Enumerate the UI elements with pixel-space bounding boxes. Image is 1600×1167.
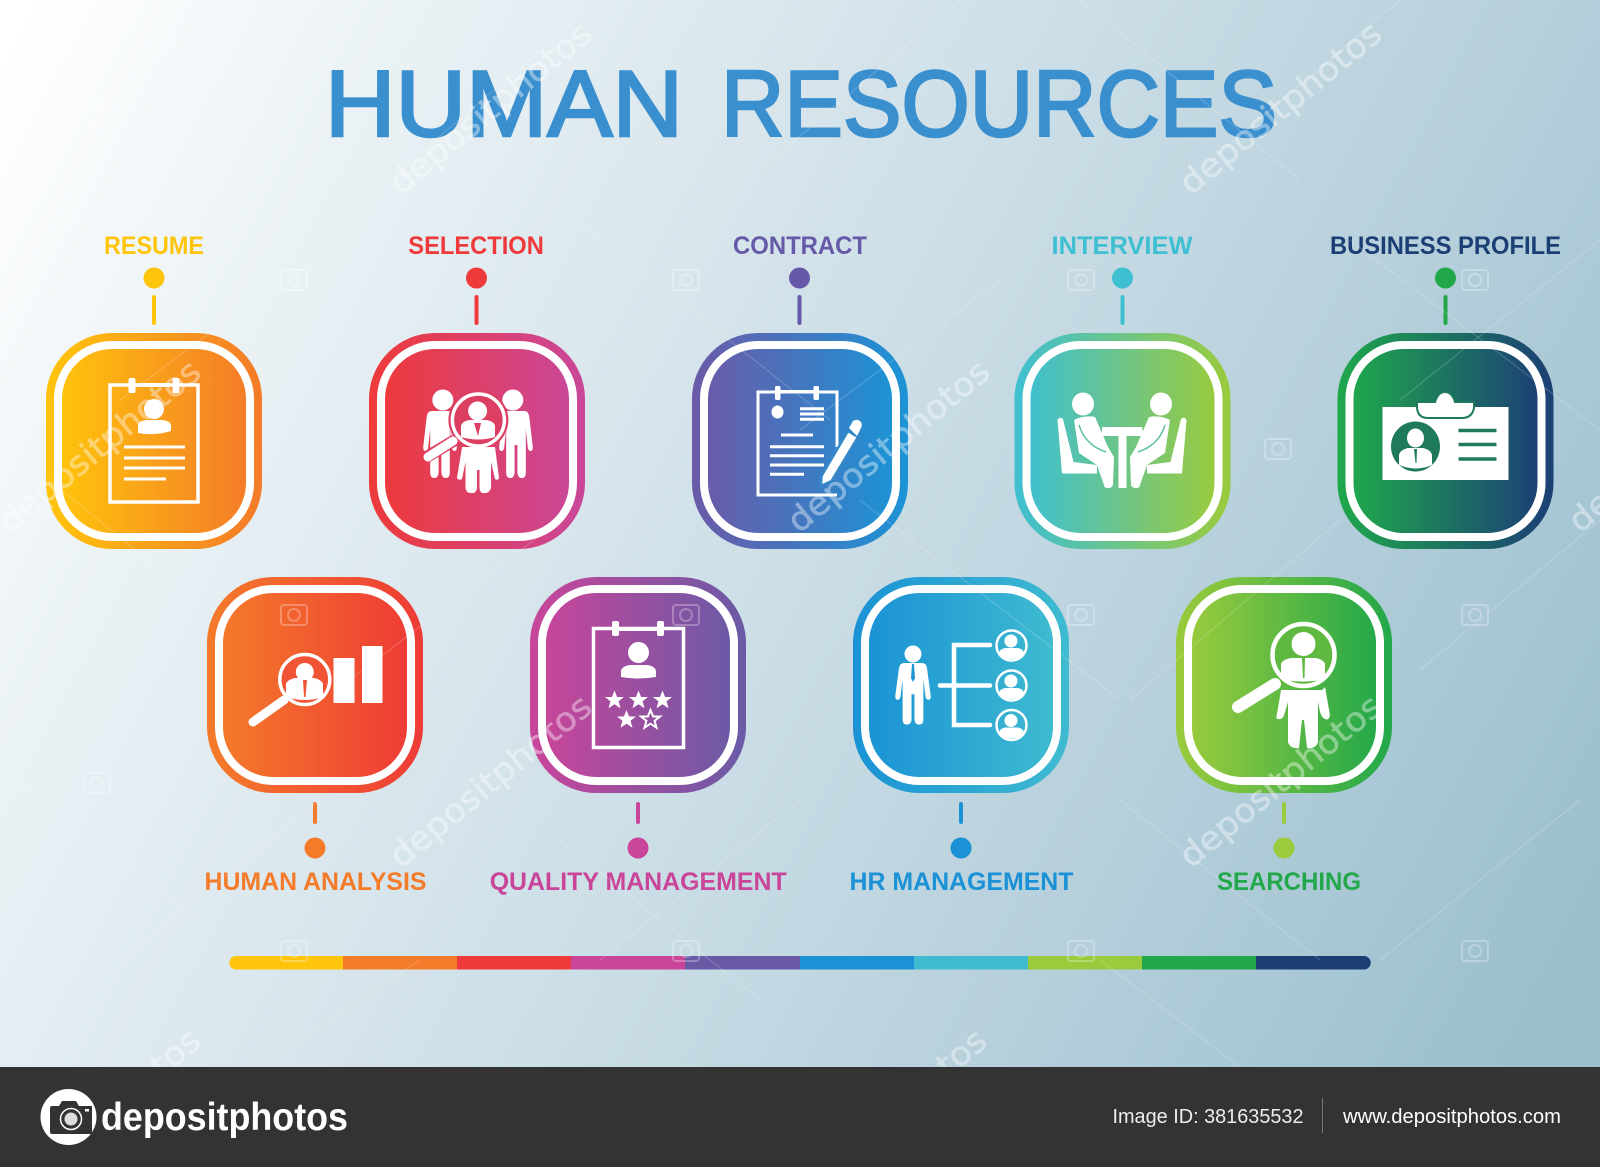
website url: www.depositphotos.com bbox=[1342, 1106, 1561, 1128]
connector: quality management bbox=[628, 802, 648, 858]
panel: searching bbox=[1176, 577, 1392, 896]
icon: quality clipboard with stars bbox=[594, 621, 684, 748]
icon: selection people with magnifier bbox=[423, 390, 533, 493]
icon: hr management org tree bbox=[895, 630, 1026, 740]
title: HUMAN bbox=[325, 51, 683, 156]
card: resume bbox=[46, 333, 262, 549]
connector: contract bbox=[789, 268, 810, 325]
card: searching bbox=[1176, 577, 1392, 793]
watermark overlay: depositphotos bbox=[381, 13, 599, 202]
title: RESOURCES bbox=[721, 51, 1277, 156]
panel: contract bbox=[692, 232, 908, 549]
logo wordmark: depositphotos bbox=[101, 1096, 348, 1139]
watermark overlay: depositphotos bbox=[779, 351, 997, 540]
footer bar bbox=[0, 1067, 1600, 1167]
label: human analysis: HUMAN ANALYSIS bbox=[204, 868, 426, 896]
label: searching: SEARCHING bbox=[1217, 868, 1361, 896]
connector: interview bbox=[1112, 268, 1133, 325]
label: contract: CONTRACT bbox=[733, 232, 867, 260]
icon: searching person under magnifier bbox=[1238, 622, 1337, 748]
connector: business profile bbox=[1435, 268, 1456, 325]
watermark overlay: depositphotos bbox=[381, 686, 599, 875]
divider bbox=[1322, 1098, 1323, 1133]
panel: quality management bbox=[490, 577, 787, 896]
connector: human analysis bbox=[304, 802, 326, 858]
icon: business id badge bbox=[1382, 392, 1508, 480]
panel: business profile bbox=[1330, 232, 1561, 549]
panel: interview bbox=[1014, 232, 1230, 549]
card: selection bbox=[369, 333, 585, 549]
card: quality management bbox=[530, 577, 746, 793]
label: hr management: HR MANAGEMENT bbox=[850, 868, 1074, 896]
timeline colour bar bbox=[229, 956, 1371, 970]
icon: resume clipboard bbox=[110, 378, 198, 502]
panel: human analysis bbox=[204, 577, 426, 896]
icon: interview two people at table bbox=[1058, 392, 1186, 488]
watermark overlay: depositphotos bbox=[1171, 13, 1389, 202]
panel: selection bbox=[369, 232, 585, 549]
label: business profile: BUSINESS PROFILE bbox=[1330, 232, 1561, 260]
card: human analysis bbox=[207, 577, 423, 793]
icon: camera logo bbox=[40, 1089, 96, 1145]
card: hr management bbox=[853, 577, 1069, 793]
title bbox=[325, 51, 1277, 156]
connector: resume bbox=[144, 268, 164, 325]
card: business profile bbox=[1338, 333, 1554, 549]
panel: hr management bbox=[850, 577, 1074, 896]
icon: human analysis magnifier and bars bbox=[253, 646, 382, 722]
label: quality management: QUALITY MANAGEMENT bbox=[490, 868, 787, 896]
card: contract bbox=[692, 333, 908, 549]
label: selection: SELECTION bbox=[408, 232, 544, 260]
watermark overlay: depositphotos bbox=[1171, 686, 1389, 875]
panel: resume bbox=[46, 232, 262, 549]
connector: hr management bbox=[950, 802, 972, 858]
card: interview bbox=[1014, 333, 1230, 549]
connector: searching bbox=[1274, 802, 1294, 858]
connector: selection bbox=[466, 268, 487, 325]
label: resume: RESUME bbox=[104, 232, 204, 260]
image id: Image ID: 381635532 bbox=[1112, 1106, 1304, 1128]
label: interview: INTERVIEW bbox=[1052, 232, 1193, 260]
icon: contract clipboard with pen bbox=[758, 386, 862, 495]
